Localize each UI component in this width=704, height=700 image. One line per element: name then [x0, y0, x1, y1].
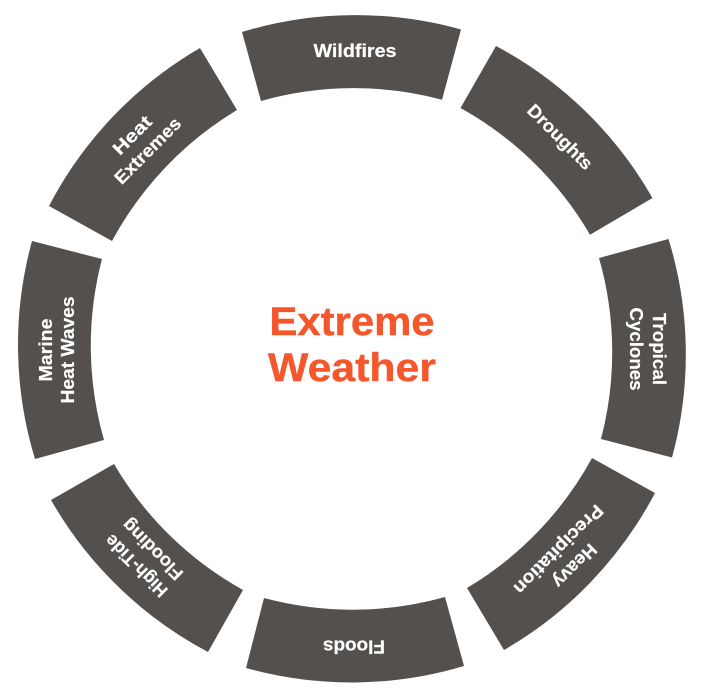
segment: Floods [246, 597, 464, 682]
segment: Marine Heat Waves: Marine [36, 318, 56, 382]
segment: Tropical Cyclones [599, 239, 686, 458]
title: Extreme Weather [268, 300, 436, 390]
segment: Heavy Precipitation: Precipitation [510, 501, 607, 598]
segment: Heavy Precipitation [467, 458, 655, 650]
segment: Heat Extremes: Extremes [110, 113, 185, 188]
segment: Tropical Cyclones: Cyclones [626, 308, 646, 390]
segment: Floods: Floods [323, 636, 385, 656]
segment: Droughts [460, 46, 652, 235]
segment: Wildfires [242, 15, 461, 101]
segment: High-Tide Flooding: Flooding [118, 515, 187, 584]
segment: Wildfires: Wildfires [314, 41, 396, 61]
title: Extreme Weather: Extreme [270, 300, 434, 344]
segment: Marine Heat Waves: Heat Waves [58, 296, 78, 404]
segment: Heavy Precipitation: Heavy [549, 540, 601, 592]
segment: Tropical Cyclones: Tropical [649, 313, 669, 385]
segment: Marine Heat Waves [18, 241, 104, 459]
segment: Heat Extremes: Heat [109, 112, 156, 159]
segment: High-Tide Flooding: High-Tide [101, 530, 172, 601]
segment: Droughts: Droughts [523, 100, 597, 174]
segment: High-Tide Flooding [51, 464, 243, 652]
title: Extreme Weather: Weather [268, 346, 436, 390]
segment: Heat Extremes [49, 48, 237, 241]
